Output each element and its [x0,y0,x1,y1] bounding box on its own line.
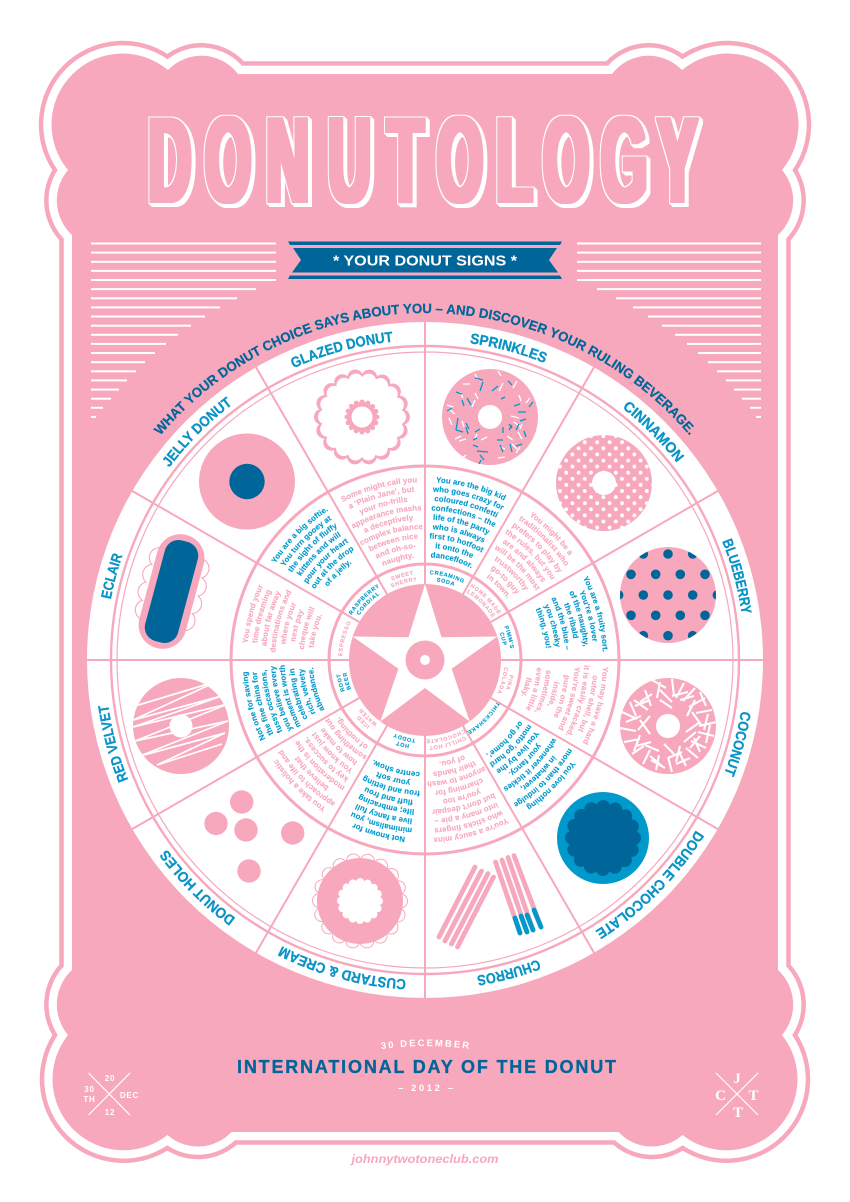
label: cinnamon: CINNAMON [624,402,684,462]
text: churros personality: but don't despair [430,791,498,820]
text: custard and cream personality: Not known for [350,821,407,846]
text: red velvet personality: moment is worth [274,663,303,730]
label: eclair: ECLAIR [101,553,123,599]
text: sprinkles personality: it onto the [436,542,473,558]
text: custard and cream personality: your soft [374,770,412,789]
beverage: iced water: ICED [356,713,372,729]
text: coconut personality: outer shell, but [578,676,597,732]
label: sprinkles: SPRINKLES [470,334,547,362]
text: red velvet personality: the fine china for [247,670,276,738]
badge: JTTC monogram [715,1071,759,1121]
text: cinnamon personality: You might be a [530,512,572,556]
text: double chocolate personality: your fancy. [506,741,545,780]
text: double chocolate personality: You love nothing [524,759,579,814]
text: sprinkles personality [430,477,506,568]
label: donut holes: DONUT HOLES [160,850,236,926]
badge: JTTC monogram: J [733,1071,741,1087]
beverage: raspberry cordial: CORDIAL [355,590,382,617]
icon: jelly donut [199,434,295,530]
badge: JTTC monogram: T [748,1088,759,1104]
text: coconut personality: You may have a hard [582,667,608,745]
beverage: thickshake: THICKSHAKE [465,700,502,737]
text: double chocolate personality: You live by the [493,728,543,779]
beverage: raspberry cordial: RASPBERRY [347,582,382,617]
text: sprinkles personality: first to hotfoot [430,532,484,552]
text: churros personality: of you. [438,753,467,770]
text: coconut personality: inside, [546,680,562,709]
text: donut holes personality: You know just [307,729,356,777]
text: custard and cream personality: fluff and frou [362,785,415,809]
icon: donut holes [204,790,304,883]
curved header line: WHAT YOUR DONUT CHOICE SAYS ABOUT YOU – AND DISCOVER YOUR RULING BEVERAGE. [153,304,694,436]
beverage: root beer: BEER [342,671,353,691]
text: donut holes personality: of nothing. [332,714,371,753]
label: double chocolate: DOUBLE CHOCOLATE [595,830,704,940]
text: eclair personality [242,584,322,652]
beverage: hot toddy: HOT [395,739,410,749]
badge: JTTC monogram: C [715,1088,726,1104]
text: donut holes personality [274,717,368,812]
icon: eclair [124,526,219,657]
text: coconut personality: even a little [523,666,546,714]
footer year: – 2012 – [398,1083,453,1094]
beverage: espresso: ESPRESSO [336,620,353,657]
text: coconut personality: pure on the [551,673,573,721]
beverage: creaming soda: CREAMING [428,568,466,585]
beverage: pina colada [497,667,514,693]
icon: custard and cream donut [317,858,403,944]
label: coconut: COCONUT [725,712,750,778]
text: donut holes personality: something out [320,715,370,765]
text: blueberry personality [536,576,608,652]
text: churros personality: You're a saucy minx [431,816,511,849]
beverage: pina colada: PINA [504,674,514,691]
text: glazed donut personality: naughty. [380,550,416,568]
badge: date cross: DEC [120,1091,139,1100]
text: blueberry personality: and the blue – [552,597,568,650]
beverage: home made lemonade: LEMONADE [465,587,498,620]
text: eclair personality: take you. [305,612,325,649]
text: eclair personality: cheque will [295,605,317,651]
text: churros personality: into many a pie – [432,800,501,829]
beverage: chilli hot chocolate: CHOCOLATE [424,727,467,746]
ribbon banner: * YOUR DONUT SIGNS * [333,252,517,270]
beverage: pimm's cup: CUP [498,632,507,647]
text: eclair personality: next pay [287,607,306,643]
text: double chocolate personality [486,722,576,810]
label: jelly donut: JELLY DONUT [162,396,230,466]
text: double chocolate personality: more than to indulge [510,746,578,813]
text: custard and cream personality: centre show. [369,757,422,782]
text: eclair personality: You spend your [238,582,265,645]
text: red velvet personality: rich, velvety [294,666,318,717]
text: jelly donut personality: pour your heart [299,534,351,586]
text: red velvet personality: fussy occasions, [256,668,285,735]
text: jelly donut personality: You are a big softie. [267,502,331,566]
beverage: hot toddy [393,734,415,748]
text: red velvet personality: you believe every [265,663,295,734]
beverage: root beer [336,672,351,692]
text: glazed donut personality: a deceptively [362,511,416,535]
text: coconut personality: it is easily cracked. [563,663,595,740]
text: blueberry personality: thing, you! [536,608,552,648]
text: sprinkles personality: confections – the [432,506,496,527]
text: custard and cream personality: minimalism, you [348,810,414,838]
text: sprinkles personality: coloured confetti [434,496,498,518]
label: blueberry: BLUEBERRY [722,538,752,613]
text: glazed donut personality: between nice [366,529,421,554]
beverage: pina colada: COLADA [495,666,509,695]
text: sprinkles personality: life of the party [433,514,490,535]
text: jelly donut personality: of a jelly. [322,557,354,589]
beverage: root beer: ROOT [336,672,347,693]
text: sprinkles personality: dancefloor. [430,552,472,568]
icon: coconut donut [620,678,716,774]
text: cinnamon personality [486,512,572,598]
text: cinnamon personality: are and always [502,540,545,582]
text: jelly donut personality: You turn gooey at [276,511,335,569]
footer date line: 30 DECEMBER [380,1038,472,1052]
text: red velvet personality: Not one for saving [237,670,268,743]
text: blueberry personality: You are a fruity sort. [584,576,608,652]
wheel base [87,322,763,998]
text: blueberry personality: the ribald [564,602,579,638]
text: churros personality: you're too [441,787,482,808]
badge: date cross: 20 [105,1074,115,1083]
text: glazed donut personality: complex balance [357,518,426,548]
text: glazed donut personality: your no-frills [357,493,410,517]
text: double chocolate personality: in whatever, [518,753,559,794]
wheel rings and spokes [87,322,763,998]
text: cinnamon personality: will be the most [495,545,540,591]
text: blueberry personality: You're a lover [580,590,597,642]
label: red velvet: RED VELVET [98,706,128,783]
text: eclair personality: time dreaming [248,587,274,645]
text: sprinkles personality: who goes crazy for [433,486,504,510]
text: cinnamon personality: the rules, but you [506,530,555,580]
text: jelly donut personality: kittens and will [293,528,344,579]
beverage: chilli hot chocolate: CHILLI HOT [427,734,467,752]
zodiac wheel [87,322,763,998]
text: coconut personality [521,666,608,745]
text: donut holes personality: approach to life and [273,747,338,812]
text: glazed donut personality [341,478,422,566]
badge: date cross: 30 [84,1085,95,1094]
text: cinnamon personality: traditionalist who [519,516,568,566]
text: churros personality: who sticks fingers [432,808,506,839]
text: churros personality: anyone to wash [425,764,488,792]
badge: date cross [83,1073,139,1117]
footer heading: INTERNATIONAL DAY OF THE DONUT [237,1057,616,1077]
text: donut holes personality: You take a holistic [268,756,328,816]
text: double chocolate personality: or go home'. [483,718,527,762]
text: blueberry personality: you cheeky [542,604,560,647]
beverage: home made lemonade: HOME MADE [468,582,503,617]
text: red velvet personality: celebrating in [285,666,310,722]
text: eclair personality: destinations and [265,587,294,654]
text: donut holes personality: how to make [316,725,360,769]
label: custard and cream: CUSTARD & CREAM [278,946,406,990]
donut name labels [98,332,752,990]
text: coconut personality: flaky. [519,676,534,698]
text: jelly donut personality: the sight of fluffy [284,518,340,575]
text: donut holes personality: believe that [291,754,331,794]
text: donut holes personality: moderation is the [289,737,348,795]
beverage: sweet sherry: SHERRY [390,576,419,590]
text: double chocolate personality: motto 'go hard [487,722,536,772]
beverage: sweet sherry: SWEET [390,570,415,583]
left stripes [91,242,276,418]
text: eclair personality: where your [277,600,299,647]
icon: cinnamon donut [556,435,652,531]
text: cinnamon personality: trustworthy [494,556,528,590]
badge: date cross: TH [83,1095,96,1104]
badge: JTTC monogram: T [733,1105,743,1121]
website url: johnnytwotoneclub.com [349,1154,498,1166]
text: double chocolate personality: whenever it tickles [500,735,563,797]
ribbon banner [288,242,562,279]
text: churros personality [427,756,509,843]
text: glazed donut personality: and oh-so- [373,539,418,561]
text: coconut personality: You're sweet and [556,665,585,733]
text: churros personality: charming for [433,776,485,800]
label: churros: CHURROS [477,960,540,986]
beverage: hot toddy: TODDY [392,731,416,744]
centre star medallion [349,584,501,736]
beverage: iced water: WATER [358,706,379,727]
icon: churros [439,856,541,947]
text: donut holes personality: key to success. [299,734,351,786]
text: glazed donut personality: a 'Plain Jane', but [346,481,417,511]
icon: red velvet donut [133,678,229,774]
text: jelly donut personality: out at the drop [307,542,357,592]
text: custard and cream personality: live a fancy full [353,802,414,828]
beverage: pimm's cup: PIMM'S [502,625,515,650]
icon: sprinkles donut [442,369,538,466]
text: glazed donut personality: Some might call you [338,471,419,504]
text: custard and cream personality: life; embracing [356,792,416,819]
text: cinnamon personality: in town. [486,573,508,598]
text: red velvet personality: abundance. [304,665,327,713]
text: sprinkles personality: who is always [432,524,485,542]
text: jelly donut personality [270,509,354,588]
right stripes [577,242,761,418]
icon: blueberry donut [620,547,716,643]
text: cinnamon personality: go-to guy [490,566,520,594]
text: red velvet personality [242,665,324,741]
text: blueberry personality: of the naughty, [570,591,588,646]
text: eclair personality: about far away [257,588,283,648]
title: DONUTOLOGY [148,92,697,229]
text: custard and cream personality [350,760,420,842]
icon: double chocolate donut [557,792,649,884]
text: cinnamon personality: prefers to play by [511,523,562,572]
text: glazed donut personality: appearance mashs [349,499,424,531]
beverage: creaming soda: SODA [436,577,456,588]
text: coconut personality: sometimes, [533,668,555,716]
text: sprinkles personality: You are the big kid [436,477,506,500]
text: churros personality: their hands [431,758,478,781]
label: glazed donut: GLAZED DONUT [291,332,392,367]
beverage: sweet sherry [390,571,416,588]
badge: date cross: 12 [105,1108,115,1117]
beverage ring labels [336,570,514,750]
text: custard and cream personality: frou and letting [360,774,422,801]
icon: glazed donut [322,377,402,457]
